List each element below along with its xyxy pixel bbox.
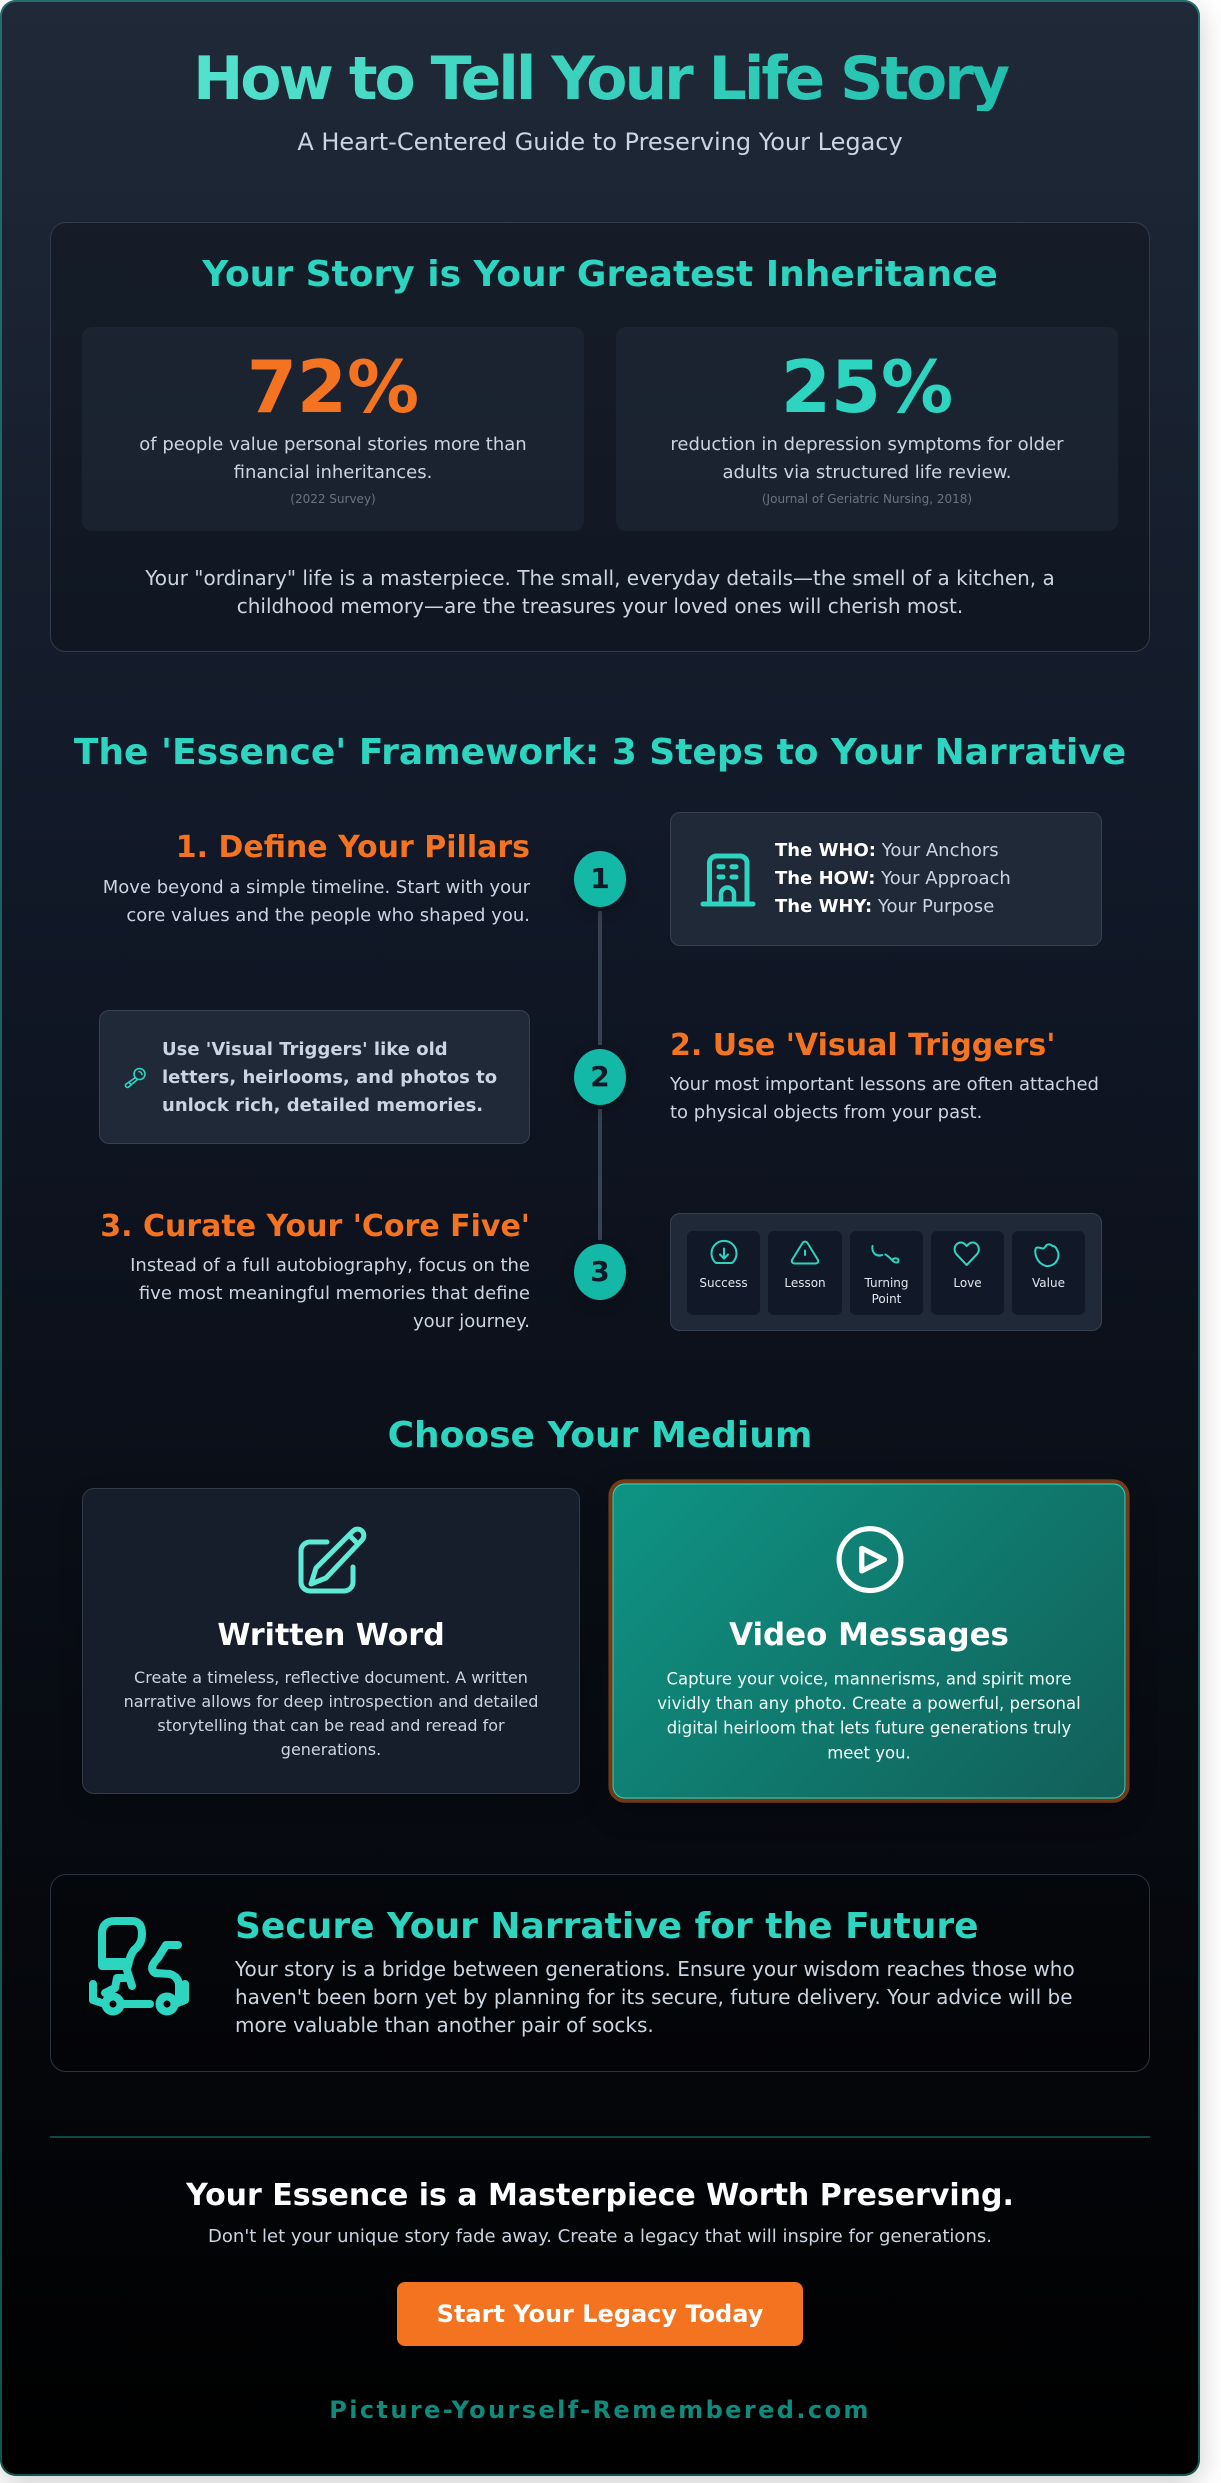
icon: heart [954,1242,980,1266]
stat description: of people value personal stories more than [139,434,527,455]
stat number: 25% [781,345,953,429]
card text [124,1668,538,1759]
step 2 number: 2 [590,1060,610,1093]
icon: pencil [298,1526,366,1594]
who how why list: The WHO: Your Anchors [775,840,999,861]
step 2 box text: Use 'Visual Triggers' like old [162,1038,448,1060]
section text: Your story is a bridge between generations. Ensure your wisdom reaches those who [235,1957,1075,1981]
card text: storytelling that can be read and reread for [157,1716,505,1735]
step 1 number [574,851,626,907]
tile: turning point [850,1231,923,1315]
step 1 [103,812,1102,946]
tile: lesson [768,1231,842,1315]
step 3 text: Instead of a full autobiography, focus on the [130,1255,530,1276]
step 2 box [99,1010,530,1144]
step 1 text: Move beyond a simple timeline. Start with your [103,876,530,898]
heading: Your Story is Your Greatest Inheritance [202,254,998,295]
icon: legacy vehicle [89,1917,189,2016]
card text [657,1668,1081,1763]
icon: building [700,854,756,906]
tile: love [931,1231,1004,1315]
tile: love: Love [953,1276,982,1290]
step 2 [99,1010,1099,1144]
step 1 heading: 1. Define Your Pillars [176,830,530,865]
stat number: 72% [247,345,419,429]
who how why list: The HOW: Your Approach [775,868,1011,889]
panel: secure narrative [50,1874,1150,2072]
tile: turning point: Point [872,1292,901,1306]
core five box [670,1213,1102,1331]
closing text: Don't let your unique story fade away. Create a legacy that will inspire for generations. [208,2226,992,2247]
step 1 box [670,812,1102,946]
who how why list: The WHY: Your Purpose [775,896,994,917]
step 2 box text [162,1038,497,1116]
intro paragraph: Your "ordinary" life is a masterpiece. The small, everyday details—the smell of a kitchen, a [145,566,1055,590]
who how why list [775,840,1011,917]
icon: success [710,1240,738,1264]
timeline connector [598,911,602,1240]
stat description: financial inheritances. [234,462,432,483]
stat description [139,434,527,483]
title [0,47,1200,111]
tile: value: Value [1032,1276,1065,1290]
website url: Picture-Yourself-Remembered.com [329,2396,871,2424]
step 2 heading: 2. Use 'Visual Triggers' [670,1028,1055,1063]
heading: choose your medium: Choose Your Medium [388,1415,812,1456]
step 2 number [574,1049,626,1105]
card: written word [82,1488,580,1794]
icon: key [124,1068,146,1088]
step 3 heading: 3. Curate Your 'Core Five' [100,1209,530,1244]
step 2 text [670,1074,1099,1123]
card: video messages [613,1483,1125,1799]
step 1 text [103,876,530,926]
icon: play [836,1526,904,1594]
icon: value [1034,1243,1060,1267]
stat card: 25% [616,327,1118,531]
card text: Capture your voice, mannerisms, and spirit more [666,1668,1071,1688]
card title: Video Messages [729,1617,1009,1653]
icon: warning [790,1240,820,1264]
footer [50,2136,1150,2436]
tile: success [687,1231,760,1315]
tile: value [1012,1231,1085,1315]
intro paragraph [145,566,1055,618]
card text: vividly than any photo. Create a powerful, personal [657,1693,1081,1713]
call to action button [397,2282,803,2346]
card text: digital heirloom that lets future generations truly [667,1718,1071,1738]
section text [235,1957,1075,2037]
step 2 text: Your most important lessons are often attached [670,1074,1099,1095]
stat description: reduction in depression symptoms for older [670,434,1064,455]
step 2 box text: letters, heirlooms, and photos to [162,1066,497,1088]
tile: turning point: Turning [864,1276,908,1290]
stat card: 72% [82,327,584,531]
step 2 box text: unlock rich, detailed memories. [162,1094,483,1116]
header [193,44,1009,156]
call to action button: Start Your Legacy Today [437,2300,763,2328]
section title: Secure Your Narrative for the Future [235,1906,979,1947]
icon: turning path [871,1245,900,1264]
card text: narrative allows for deep introspection and detailed [124,1692,538,1711]
step 3 number: 3 [590,1254,610,1288]
card title: Written Word [217,1618,445,1653]
step 2 text: to physical objects from your past. [670,1102,982,1123]
subtitle: A Heart-Centered Guide to Preserving Your Legacy [297,128,903,156]
stat source: (Journal of Geriatric Nursing, 2018) [762,492,972,506]
tile: success: Success [699,1276,748,1290]
heading: framework: The 'Essence' Framework: 3 Steps to Your Narrative [74,732,1126,773]
card text: generations. [281,1740,381,1759]
title: How to Tell Your Life Story [193,44,1007,114]
step 3 number [574,1244,626,1300]
step 1 text: core values and the people who shaped you. [126,904,530,926]
step 3 [100,1209,1102,1332]
section text: more valuable than another pair of socks. [235,2013,654,2037]
step 1 number: 1 [590,862,610,895]
closing title: Your Essence is a Masterpiece Worth Preserving. [186,2178,1014,2213]
step 3 text [130,1255,530,1332]
stat description: adults via structured life review. [722,462,1012,483]
intro paragraph: childhood memory—are the treasures your loved ones will cherish most. [237,594,963,618]
stat source: (2022 Survey) [290,492,376,506]
stat description [670,434,1064,483]
step 3 text: five most meaningful memories that define [139,1283,530,1304]
panel: greatest inheritance [50,222,1150,652]
step 3 text: your journey. [413,1311,530,1332]
card text: meet you. [827,1743,911,1763]
card text: Create a timeless, reflective document. A written [134,1668,528,1687]
section text: haven't been born yet by planning for its secure, future delivery. Your advice will be [235,1985,1073,2009]
tile: lesson: Lesson [784,1276,826,1290]
